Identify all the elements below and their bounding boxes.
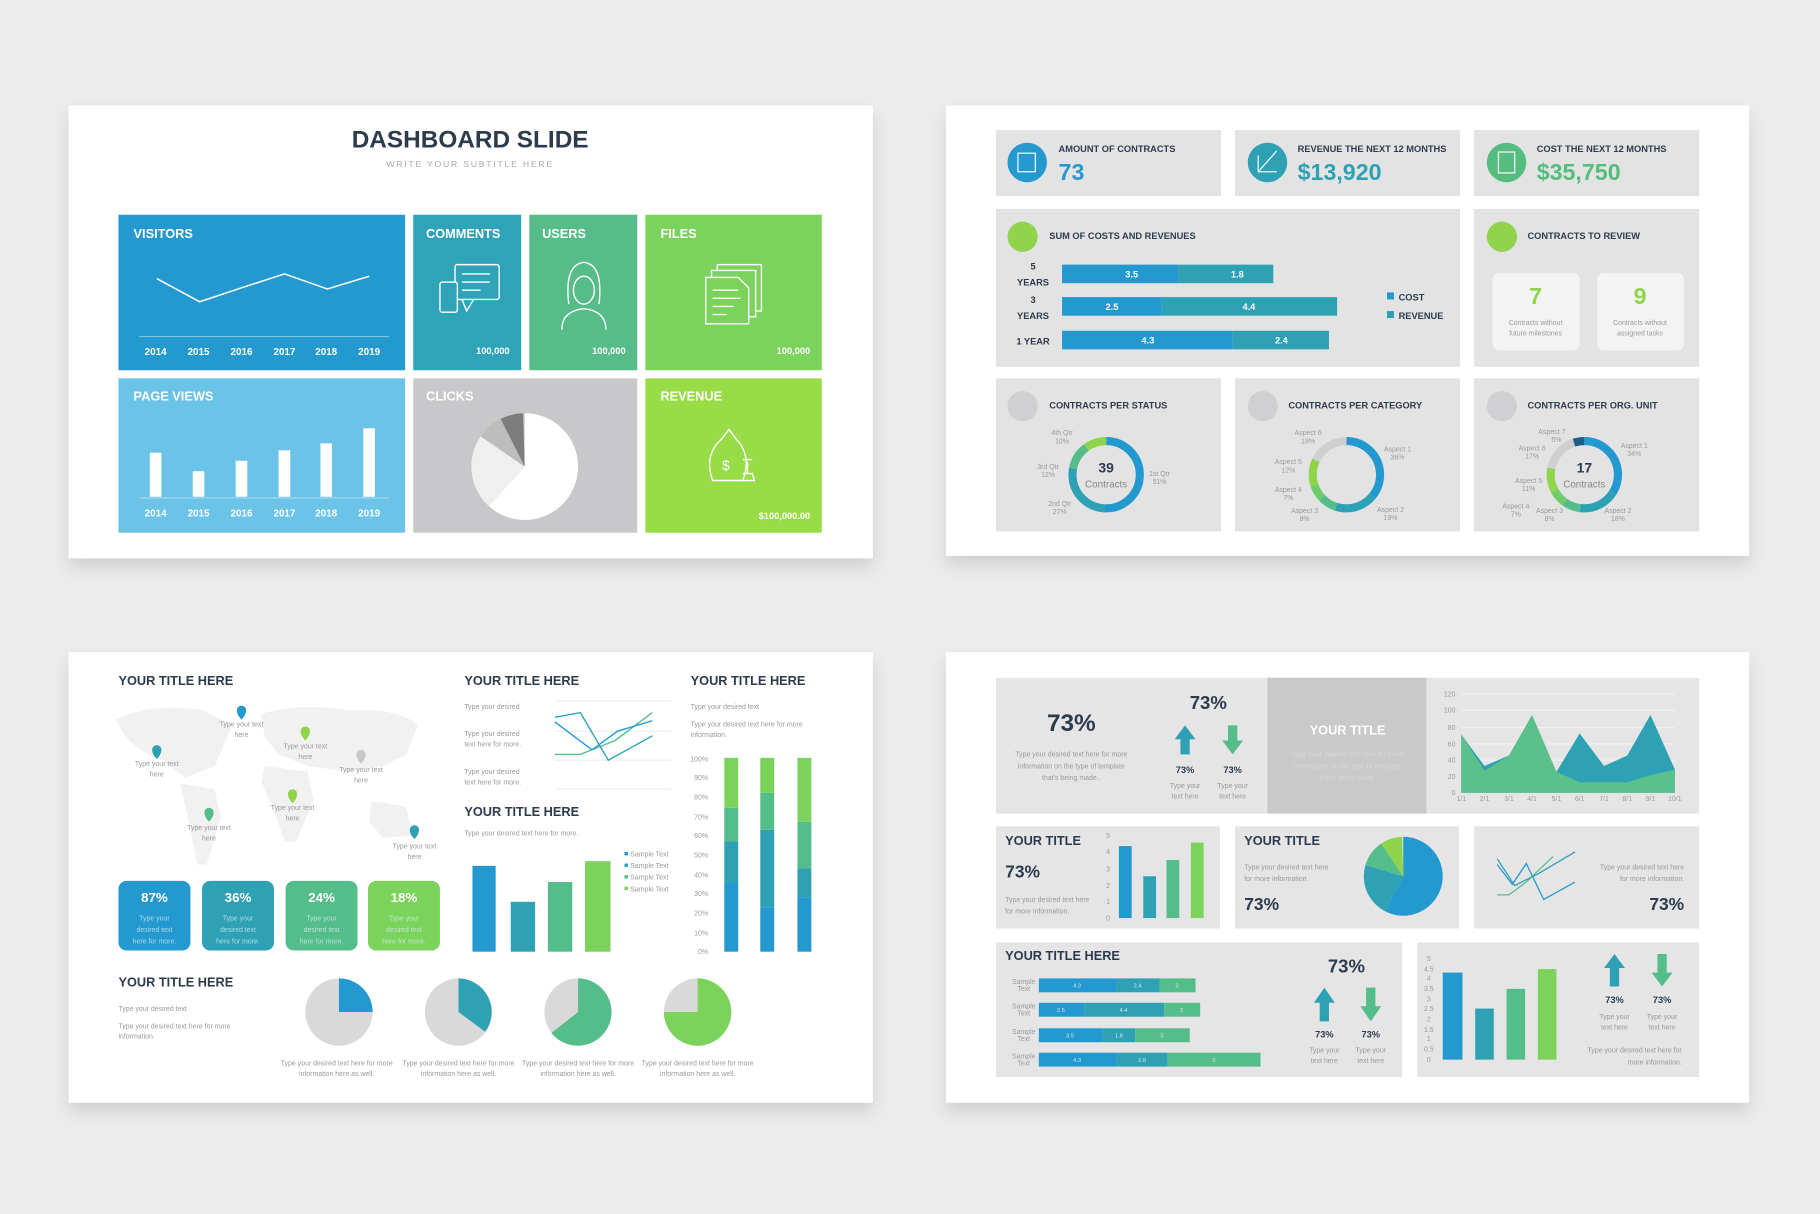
pies block: information here as well. bbox=[540, 1071, 616, 1078]
card: cost next 12 months: COST THE NEXT 12 MONTHS bbox=[1537, 144, 1666, 154]
panel: bar chart with arrows: 3 bbox=[1427, 997, 1431, 1004]
stacked bar chart block: 80% bbox=[694, 795, 708, 802]
panel: contracts per org unit: 7% bbox=[1511, 511, 1521, 518]
panel: sum of costs and revenues: 4.4 bbox=[1242, 302, 1256, 312]
stacked bar chart block: Type your desired text bbox=[691, 704, 759, 711]
panel: stacked horizontal bars: 2.4 bbox=[1133, 984, 1142, 990]
slide: map and charts bbox=[69, 652, 873, 1103]
tile: users: 100,000 bbox=[592, 346, 626, 356]
pies block: information here as well. bbox=[660, 1071, 735, 1078]
line chart block: YOUR TITLE HERE bbox=[464, 673, 579, 688]
panel: bar chart with arrows: 1.5 bbox=[1424, 1027, 1434, 1034]
panel: bar kpi: 0 bbox=[1106, 915, 1110, 922]
tile: visitors: 2017 bbox=[273, 347, 296, 358]
line chart block: Type your desired bbox=[464, 731, 520, 738]
card: cost next 12 months bbox=[1474, 130, 1699, 196]
panel: bar kpi: 73% bbox=[1005, 861, 1040, 881]
percent boxes: desired text bbox=[304, 927, 340, 934]
tile: comments: 100,000 bbox=[476, 346, 510, 356]
tile: comments: COMMENTS bbox=[426, 226, 500, 241]
tile: visitors: 2019 bbox=[358, 347, 381, 358]
panel: stacked horizontal bars: Sample bbox=[1012, 1053, 1036, 1060]
panel: stacked horizontal bars: 2 bbox=[1180, 1008, 1183, 1014]
panel: sum of costs and revenues: COST bbox=[1399, 293, 1425, 303]
panel: contracts per category: Aspect 4 bbox=[1275, 487, 1302, 494]
panel: line kpi: for more information. bbox=[1620, 876, 1684, 883]
stacked bar chart block bbox=[690, 673, 811, 956]
area chart: 120 bbox=[1444, 691, 1456, 698]
panel: contracts per status: 39 bbox=[1098, 459, 1114, 475]
panel: top kpi: that's being made. bbox=[1319, 775, 1376, 782]
panel: stacked horizontal bars: 4.3 bbox=[1073, 1058, 1081, 1064]
card: amount of contracts: AMOUNT OF CONTRACTS bbox=[1059, 144, 1175, 154]
tile: revenue: $100,000.00 bbox=[759, 511, 810, 521]
panel: pie kpi: 73% bbox=[1244, 894, 1279, 914]
panel: contracts per category bbox=[1235, 378, 1460, 532]
slide: map and charts: Type your text bbox=[271, 805, 314, 812]
percent boxes: here for more. bbox=[300, 939, 343, 946]
tile: visitors: 2015 bbox=[188, 347, 210, 358]
area chart: 9/1 bbox=[1646, 796, 1655, 803]
panel: contracts per status: 51% bbox=[1153, 479, 1166, 486]
panel: bar chart with arrows: 3.5 bbox=[1424, 986, 1434, 993]
title: DASHBOARD SLIDE bbox=[352, 126, 589, 153]
panel: contracts per org unit: 17 bbox=[1577, 459, 1592, 475]
slide: dashboard tiles bbox=[69, 106, 873, 558]
panel: contracts per category: Aspect 2 bbox=[1377, 507, 1404, 514]
tile: users bbox=[529, 215, 637, 370]
line chart block bbox=[464, 673, 671, 789]
panel: pie kpi: Type your desired text here bbox=[1244, 864, 1329, 871]
panel: contracts per status: 4th Qtr bbox=[1051, 430, 1073, 437]
pies block: Type your desired text here for more bbox=[281, 1060, 393, 1067]
panel: stacked horizontal bars: text here bbox=[1311, 1058, 1338, 1065]
panel: stacked horizontal bars: 73% bbox=[1361, 1030, 1380, 1040]
panel: contracts per status: 27% bbox=[1053, 509, 1067, 516]
card: revenue next 12 months: $13,920 bbox=[1298, 159, 1382, 185]
panel: contracts per org unit: Aspect 2 bbox=[1604, 508, 1632, 515]
slide: map and charts: here bbox=[286, 816, 300, 823]
panel: bar kpi: 4 bbox=[1106, 849, 1110, 856]
slide: map and charts: here bbox=[407, 854, 422, 861]
panel: contracts per org unit: CONTRACTS PER ORG. UNIT bbox=[1527, 401, 1658, 411]
panel: stacked horizontal bars: 4.3 bbox=[1073, 984, 1081, 990]
percent boxes: here for more. bbox=[133, 939, 176, 946]
panel: stacked horizontal bars: YOUR TITLE HERE bbox=[1005, 948, 1120, 963]
line chart block: text here for more. bbox=[464, 741, 521, 748]
panel: bar kpi: 3 bbox=[1106, 867, 1110, 874]
percent boxes: Type your bbox=[223, 915, 254, 922]
panel: stacked horizontal bars: Sample bbox=[1012, 979, 1036, 986]
slide: map and charts: here bbox=[298, 754, 312, 761]
area chart: 80 bbox=[1448, 725, 1456, 732]
panel: top kpi: 73% bbox=[1047, 710, 1096, 737]
panel: pie kpi: for more information. bbox=[1244, 876, 1308, 883]
panel: stacked horizontal bars: 3 bbox=[1160, 1034, 1163, 1040]
panel: stacked horizontal bars: text here bbox=[1357, 1058, 1384, 1065]
area chart bbox=[1444, 691, 1682, 803]
stacked bar chart block: YOUR TITLE HERE bbox=[691, 673, 805, 688]
panel: contracts per category: 18% bbox=[1301, 438, 1315, 445]
stacked bar chart block: 20% bbox=[694, 911, 708, 918]
panel: contracts per org unit: Aspect 3 bbox=[1536, 508, 1563, 515]
panel: top kpi: information on the type of template bbox=[1294, 763, 1401, 770]
bar chart block bbox=[464, 804, 668, 952]
card: revenue next 12 months: REVENUE THE NEXT 12 MONTHS bbox=[1298, 144, 1446, 154]
stacked bar chart block: 50% bbox=[694, 853, 708, 860]
percent boxes: 36% bbox=[225, 890, 251, 905]
bar chart block: Sample Text bbox=[630, 863, 668, 870]
line chart block: Type your desired bbox=[464, 704, 520, 711]
panel: stacked horizontal bars: 2.8 bbox=[1138, 1058, 1146, 1064]
area chart: 60 bbox=[1448, 741, 1456, 748]
panel: contracts per category: Aspect 6 bbox=[1295, 430, 1322, 437]
panel: sum of costs and revenues: 1.8 bbox=[1231, 269, 1244, 279]
panel: sum of costs and revenues: 3 bbox=[1030, 295, 1036, 305]
stacked bar chart block: 90% bbox=[694, 775, 708, 782]
stacked bar chart block: information. bbox=[691, 732, 727, 739]
tile: page views: 2014 bbox=[145, 508, 167, 519]
panel: stacked horizontal bars: Text bbox=[1017, 1011, 1030, 1018]
stacked bar chart block: 100% bbox=[690, 756, 708, 763]
panel: contracts per org unit: 8% bbox=[1544, 516, 1555, 523]
panel: stacked horizontal bars: Sample bbox=[1012, 1029, 1036, 1036]
bar chart block: Type your desired text here for more. bbox=[464, 831, 578, 838]
area chart: 20 bbox=[1448, 774, 1456, 781]
panel: contracts per category: Aspect 5 bbox=[1275, 459, 1302, 466]
panel: bar kpi: for more information. bbox=[1005, 908, 1069, 915]
subtitle: WRITE YOUR SUBTITLE HERE bbox=[386, 159, 554, 169]
panel: top kpi: text here bbox=[1172, 794, 1199, 801]
bar chart block: YOUR TITLE HERE bbox=[464, 804, 579, 819]
slide: contracts dashboard bbox=[946, 106, 1749, 556]
panel: top kpi: 73% bbox=[1223, 765, 1242, 775]
stacked bar chart block: Type your desired text here for more bbox=[691, 722, 803, 729]
panel: bar chart with arrows: 73% bbox=[1653, 995, 1671, 1005]
heading: map: YOUR TITLE HERE bbox=[118, 673, 233, 688]
panel: contracts per category: CONTRACTS PER CATEGORY bbox=[1288, 401, 1423, 411]
slide: map and charts: Type your text bbox=[339, 767, 383, 774]
area chart: 3/1 bbox=[1504, 796, 1514, 803]
slide: map and charts: here bbox=[150, 771, 164, 778]
percent boxes: Type your bbox=[306, 915, 338, 922]
percent boxes: 24% bbox=[308, 890, 335, 905]
slide: map and charts: Type your text bbox=[393, 843, 436, 850]
tile: page views: 2016 bbox=[231, 508, 253, 519]
stacked bar chart block: 70% bbox=[694, 814, 708, 821]
panel: sum of costs and revenues: 2.4 bbox=[1275, 336, 1289, 346]
bar chart block: Sample Text bbox=[630, 875, 668, 882]
panel: top kpi bbox=[996, 678, 1699, 814]
panel: pie kpi bbox=[1235, 826, 1459, 928]
area chart: 4/1 bbox=[1527, 796, 1537, 803]
panel: sum of costs and revenues: 4.3 bbox=[1141, 336, 1154, 346]
panel: bar chart with arrows: 2 bbox=[1427, 1016, 1431, 1023]
area chart: 0 bbox=[1452, 790, 1456, 797]
panel: bar chart with arrows: 1 bbox=[1427, 1036, 1431, 1043]
panel: stacked horizontal bars: Sample bbox=[1012, 1004, 1036, 1011]
percent boxes: 87% bbox=[141, 890, 168, 905]
tile: page views: PAGE VIEWS bbox=[134, 388, 213, 403]
area chart: 100 bbox=[1444, 708, 1456, 715]
tile: page views: 2018 bbox=[315, 508, 338, 519]
panel: bar kpi: Type your desired text here bbox=[1005, 897, 1090, 904]
card: amount of contracts: 73 bbox=[1059, 159, 1084, 185]
tile: visitors: 2018 bbox=[315, 347, 338, 358]
card: cost next 12 months: $35,750 bbox=[1537, 159, 1621, 185]
world map bbox=[116, 707, 418, 865]
stacked bar chart block: 30% bbox=[694, 891, 708, 898]
panel: stacked horizontal bars: 73% bbox=[1328, 956, 1365, 977]
panel: contracts to review: assigned tasks bbox=[1617, 330, 1664, 337]
slide: map and charts: here bbox=[235, 732, 249, 739]
panel: bar chart with arrows: Type your bbox=[1599, 1014, 1630, 1021]
panel: contracts per status: CONTRACTS PER STATUS bbox=[1049, 401, 1167, 411]
panel: top kpi: Type your bbox=[1170, 783, 1201, 790]
stacked bar chart block: 0% bbox=[698, 949, 708, 956]
panel: sum of costs and revenues: SUM OF COSTS AND REVENUES bbox=[1049, 231, 1196, 241]
tile: page views: 2017 bbox=[273, 508, 296, 519]
line chart block: text here for more. bbox=[464, 780, 521, 787]
percent boxes: desired text bbox=[386, 927, 422, 934]
panel: contracts per category: 8% bbox=[1300, 516, 1310, 523]
panel: contracts per status: 1st Qtr bbox=[1149, 471, 1171, 478]
panel: contracts per org unit: 18% bbox=[1611, 516, 1625, 523]
panel: pie kpi: YOUR TITLE bbox=[1244, 833, 1320, 848]
panel: top kpi: information on the type of template bbox=[1018, 763, 1125, 770]
panel: contracts per org unit: 34% bbox=[1627, 451, 1641, 458]
slide: map and charts: here bbox=[202, 835, 216, 842]
panel: stacked horizontal bars: 3.5 bbox=[1066, 1034, 1074, 1040]
panel: sum of costs and revenues: REVENUE bbox=[1399, 311, 1443, 321]
pies block: information here as well. bbox=[421, 1071, 496, 1078]
panel: top kpi: Type your desired text here for more bbox=[1015, 752, 1127, 759]
panel: contracts to review: CONTRACTS TO REVIEW bbox=[1527, 231, 1640, 241]
panel: stacked horizontal bars bbox=[996, 942, 1402, 1077]
panel: bar chart with arrows: Type your desired text here for bbox=[1587, 1048, 1682, 1055]
tile: page views bbox=[118, 378, 405, 533]
tile: page views: 2015 bbox=[188, 508, 210, 519]
panel: sum of costs and revenues: 5 bbox=[1030, 261, 1036, 271]
panel: bar chart with arrows bbox=[1417, 942, 1699, 1077]
panel: line kpi: 73% bbox=[1649, 894, 1684, 914]
bar chart block: Sample Text bbox=[630, 886, 668, 893]
panel: bar kpi: 5 bbox=[1106, 833, 1110, 840]
area chart: 40 bbox=[1448, 758, 1456, 765]
panel: contracts per status: Contracts bbox=[1085, 479, 1127, 490]
card: amount of contracts bbox=[996, 130, 1221, 196]
panel: sum of costs and revenues: YEARS bbox=[1017, 278, 1049, 288]
panel: bar chart with arrows: text here bbox=[1601, 1024, 1628, 1031]
percent boxes: desired text bbox=[220, 927, 256, 934]
panel: line kpi: Type your desired text here bbox=[1600, 864, 1684, 871]
tile: revenue: $ bbox=[722, 457, 730, 473]
area chart: 2/1 bbox=[1480, 796, 1489, 803]
area chart: 10/1 bbox=[1668, 796, 1682, 803]
panel: line kpi bbox=[1474, 826, 1699, 928]
pies block: Type your desired text bbox=[118, 1006, 187, 1013]
percent boxes: desired text bbox=[136, 927, 172, 934]
panel: bar chart with arrows: 0 bbox=[1427, 1057, 1431, 1064]
panel: contracts per category: 19% bbox=[1384, 515, 1397, 522]
slide: map and charts: Type your text bbox=[220, 722, 263, 729]
panel: contracts per category: Aspect 1 bbox=[1384, 446, 1411, 453]
panel: contracts per org unit: Contracts bbox=[1563, 479, 1605, 490]
tile: files bbox=[645, 215, 822, 370]
panel: contracts per org unit: 5% bbox=[1551, 437, 1561, 444]
pies block bbox=[118, 975, 754, 1078]
panel: top kpi: Type your desired text here for more bbox=[1292, 752, 1404, 759]
pies block: Type your desired text here for more bbox=[522, 1060, 634, 1067]
panel: contracts per org unit: Aspect 6 bbox=[1519, 445, 1546, 452]
panel: top kpi: 73% bbox=[1190, 692, 1227, 713]
bar chart block: Sample Text bbox=[630, 852, 668, 859]
panel: top kpi: that's being made.. bbox=[1042, 775, 1101, 782]
tile: files: 100,000 bbox=[777, 346, 810, 356]
pies block: information. bbox=[118, 1034, 155, 1041]
panel: sum of costs and revenues: 3.5 bbox=[1125, 269, 1138, 279]
tile: revenue: REVENUE bbox=[660, 388, 722, 403]
panel: contracts per org unit: Aspect 5 bbox=[1515, 478, 1542, 485]
panel: stacked horizontal bars: Type your bbox=[1309, 1048, 1340, 1055]
panel: contracts to review: 7 bbox=[1529, 283, 1542, 309]
tile: visitors: 2016 bbox=[231, 347, 253, 358]
area chart: 8/1 bbox=[1622, 796, 1632, 803]
panel: stacked horizontal bars: Text bbox=[1017, 986, 1030, 993]
panel: bar chart with arrows: 4 bbox=[1427, 976, 1431, 983]
pies block: YOUR TITLE HERE bbox=[118, 975, 233, 990]
panel: contracts per status: 2nd Qtr bbox=[1048, 501, 1072, 508]
panel: contracts per category: 7% bbox=[1283, 495, 1293, 502]
panel: bar chart with arrows: 2.5 bbox=[1424, 1006, 1434, 1013]
tile: clicks pie: CLICKS bbox=[426, 388, 473, 403]
panel: stacked horizontal bars: Text bbox=[1017, 1036, 1030, 1043]
panel: stacked horizontal bars: 4.4 bbox=[1120, 1008, 1128, 1014]
panel: top kpi: 73% bbox=[1176, 765, 1194, 775]
panel: contracts per status bbox=[996, 378, 1221, 532]
panel: contracts per org unit: 11% bbox=[1522, 486, 1535, 493]
panel: sum of costs and revenues: YEARS bbox=[1017, 311, 1049, 321]
slide: kpi panels bbox=[946, 652, 1749, 1103]
map pins bbox=[152, 706, 419, 839]
percent boxes: here for more. bbox=[216, 939, 260, 946]
panel: contracts per org unit: Aspect 7 bbox=[1538, 429, 1565, 436]
pies block: Type your desired text here for more bbox=[402, 1060, 515, 1067]
panel: bar kpi: 2 bbox=[1106, 883, 1110, 890]
panel: bar chart with arrows: 73% bbox=[1605, 995, 1624, 1005]
panel: stacked horizontal bars: 2 bbox=[1175, 984, 1179, 990]
panel: contracts per org unit: Aspect 1 bbox=[1621, 443, 1648, 450]
tile: users: USERS bbox=[542, 226, 586, 241]
card: revenue next 12 months bbox=[1235, 130, 1460, 196]
percent boxes: Type your bbox=[139, 915, 170, 922]
panel: stacked horizontal bars: 1.8 bbox=[1115, 1034, 1123, 1040]
slide: map and charts: Type your text bbox=[283, 744, 327, 751]
panel: contracts per status: 10% bbox=[1055, 438, 1069, 445]
panel: bar chart with arrows: text here bbox=[1649, 1024, 1676, 1031]
panel: contracts to review: 9 bbox=[1634, 283, 1647, 309]
panel: stacked horizontal bars: 2.5 bbox=[1057, 1008, 1065, 1014]
panel: contracts per category: 12% bbox=[1281, 467, 1295, 474]
panel: sum of costs and revenues: 1 YEAR bbox=[1016, 337, 1050, 347]
tile: files: FILES bbox=[660, 226, 697, 241]
slide: map and charts: Type your text bbox=[135, 761, 179, 768]
panel: bar chart with arrows: more information. bbox=[1628, 1059, 1682, 1066]
panel: contracts per status: 3rd Qtr bbox=[1037, 464, 1060, 471]
panel: top kpi: text here bbox=[1219, 794, 1246, 801]
panel: bar chart with arrows: Type your bbox=[1647, 1014, 1678, 1021]
percent boxes: Type your bbox=[389, 915, 420, 922]
tile: page views: 2019 bbox=[358, 508, 381, 519]
tile: visitors bbox=[118, 215, 405, 370]
stacked bar chart block: 10% bbox=[694, 930, 708, 937]
percent boxes bbox=[118, 881, 440, 951]
panel: contracts to review: Contracts without bbox=[1509, 320, 1562, 327]
pies block: Type your desired text here for more bbox=[642, 1060, 754, 1067]
area chart: 5/1 bbox=[1552, 796, 1561, 803]
percent boxes: 18% bbox=[391, 890, 417, 905]
stacked bar chart block: 60% bbox=[694, 833, 708, 840]
panel: contracts per status: 12% bbox=[1041, 472, 1055, 479]
pies block: information here as well. bbox=[299, 1071, 374, 1078]
percent boxes: here for more. bbox=[382, 939, 426, 946]
panel: contracts to review: future milestones bbox=[1509, 330, 1563, 337]
panel: bar chart with arrows: 4.5 bbox=[1424, 966, 1434, 973]
panel: bar kpi: YOUR TITLE bbox=[1005, 833, 1081, 848]
panel: contracts per category: Aspect 3 bbox=[1291, 508, 1318, 515]
panel: stacked horizontal bars: Type your bbox=[1355, 1048, 1387, 1055]
panel: stacked horizontal bars: 5 bbox=[1212, 1058, 1216, 1064]
tile: visitors: VISITORS bbox=[134, 226, 193, 241]
panel: stacked horizontal bars: 73% bbox=[1315, 1030, 1334, 1040]
area chart: 1/1 bbox=[1456, 796, 1466, 803]
panel: sum of costs and revenues bbox=[996, 209, 1460, 367]
panel: bar kpi bbox=[996, 826, 1220, 928]
panel: contracts per org unit bbox=[1474, 378, 1699, 532]
panel: contracts per category: 36% bbox=[1390, 455, 1404, 462]
tile: visitors: 2014 bbox=[145, 347, 167, 358]
area chart: 7/1 bbox=[1599, 796, 1609, 803]
panel: top kpi: Type your bbox=[1217, 783, 1249, 790]
tile: comments bbox=[413, 215, 521, 370]
panel: bar kpi: 1 bbox=[1106, 899, 1110, 906]
panel: contracts to review: Contracts without bbox=[1613, 320, 1667, 327]
slide: map and charts: Type your text bbox=[187, 825, 231, 832]
line chart block: Type your desired bbox=[464, 769, 520, 776]
slide: map and charts: here bbox=[354, 777, 368, 784]
panel: bar chart with arrows: 5 bbox=[1427, 956, 1431, 963]
panel: stacked horizontal bars: Text bbox=[1017, 1060, 1030, 1067]
panel: contracts per org unit: 17% bbox=[1525, 453, 1539, 460]
tile: revenue bbox=[645, 378, 822, 533]
tile: clicks pie bbox=[413, 378, 637, 533]
area chart: 6/1 bbox=[1575, 796, 1585, 803]
stacked bar chart block: 40% bbox=[694, 872, 708, 879]
panel: contracts to review bbox=[1474, 209, 1699, 367]
panel: top kpi: YOUR TITLE bbox=[1310, 723, 1385, 738]
panel: contracts per org unit: Aspect 4 bbox=[1502, 503, 1529, 510]
panel: sum of costs and revenues: 2.5 bbox=[1106, 302, 1118, 312]
pies block: Type your desired text here for more bbox=[118, 1023, 231, 1030]
panel: bar chart with arrows: 0.5 bbox=[1424, 1047, 1434, 1054]
